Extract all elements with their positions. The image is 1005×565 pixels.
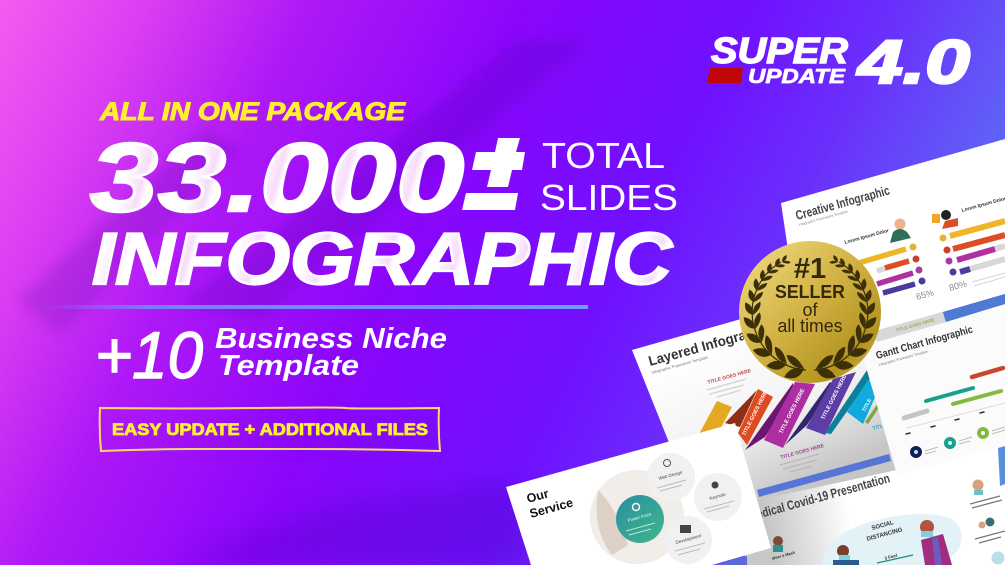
circle: web design: Web Design [658,469,683,481]
divider rule [42,305,588,309]
side icons: covid: Wear a Mask [771,549,796,561]
slide: covid presentation [716,430,1005,565]
slide: creative infographic: Infographic Powerpoint Template [798,209,848,227]
medal text [775,253,845,336]
illustration: social distancing: DISTANCING [866,527,904,543]
circle: development [664,516,712,564]
kicker: all in one package: ALL IN ONE PACKAGE [99,98,406,126]
label: total slides: TOTAL [542,135,665,176]
circle: power point [616,495,664,543]
left column bars [844,218,935,302]
title: layered: Layered Infographic [647,319,774,369]
medal text: all times [778,316,842,336]
slide: gantt chart: Infographic Powerpoint Template [878,349,928,367]
plus minus sign [462,138,525,210]
heading: our service: Service [528,495,575,521]
heading: our service: Our [525,486,550,506]
headline: 33.000 plus minus: 33.000 [90,123,464,232]
badge: super update 4.0: 4.0 [855,28,970,96]
label: total slides: SLIDES [540,177,678,218]
illustration: social distancing: 3 Feet [884,553,898,561]
circle: power point: Power Point [627,511,652,523]
circle: keynote [694,473,742,521]
headline: 33.000 plus minus [90,123,525,232]
circle: web design [647,453,695,501]
slide: layered infographic [632,278,906,520]
slide: gantt chart [860,304,1005,475]
gantt bars [904,368,1005,434]
ribbon chart: TITLE [861,397,873,413]
photo circle [590,470,684,564]
slide: creative infographic: TITLE GOES HERE [895,317,935,333]
label: total slides [540,135,678,218]
badge: super update 4.0 [707,28,970,96]
captions: layered: TITLE [872,422,888,432]
ribbon chart: TITLE GOES HERE [741,390,769,437]
laurel wreath [743,255,877,380]
slide: layered infographic: Infographic Powerpoint Template [651,354,709,375]
right column bars: 80% [948,278,968,293]
title: gantt: Gantt Chart Infographic [875,324,974,362]
captions: layered: TITLE GOES HERE [780,443,826,461]
circle: development: Development [675,533,703,545]
badge: super update 4.0: SUPER [711,30,848,71]
ribbon chart: TITLE GOES HERE [778,388,806,435]
badge: super update 4.0: UPDATE [748,66,846,88]
plus ten business niche template: +10 [95,318,203,392]
medal text: SELLER [775,281,845,302]
plus ten business niche template: Business Niche [215,323,447,355]
plus ten business niche template [95,318,447,392]
title: creative: Creative Infographic [794,183,891,223]
headline: infographic: INFOGRAPHIC [92,219,673,300]
heading: our service [525,486,575,521]
ribbon chart: TITLE GOES HERE [820,374,848,421]
slide: our service [506,423,771,565]
plus ten business niche template: Template [218,350,359,382]
callout: easy update + additional files [100,408,440,451]
right column bars [932,196,1005,293]
medal text: of [802,300,819,320]
side icons: covid [771,480,1005,564]
brush strokes [18,40,590,565]
gold medal [739,241,881,383]
captions: layered: TITLE GOES HERE [707,368,753,386]
left column bars: Lorem Ipsum Dolor [844,228,890,246]
callout: easy update + additional files: EASY UPDATE + ADDITIONAL FILES [112,420,428,439]
legend icons [910,427,1005,458]
captions: layered [707,368,888,472]
left column bars: 65% [915,287,935,302]
illustration: social distancing: SOCIAL [871,520,895,532]
medal text: #1 [794,253,826,285]
title: covid: Medical Covid-19 Presentation [747,470,892,524]
circle: keynote: Keynote [709,492,727,501]
illustration: social distancing [822,514,962,565]
ribbon chart [698,370,884,450]
slide: creative infographic [781,139,1005,342]
